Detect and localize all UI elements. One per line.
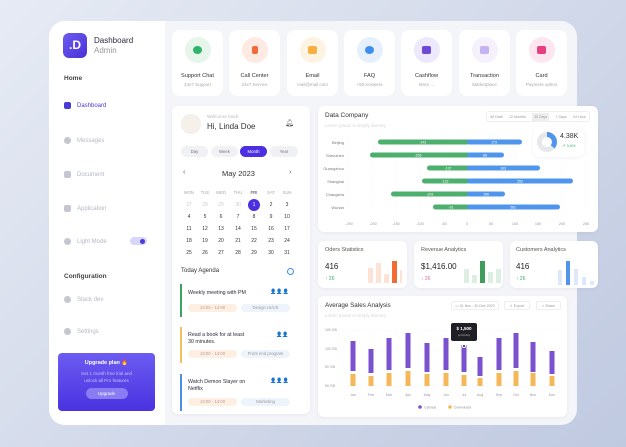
top card: call center: 24x7 Service [241, 82, 268, 87]
agenda item 1: Design UI/UX [252, 305, 279, 310]
text: 14 [235, 226, 241, 232]
nav: stack dev: Stack dev [77, 296, 103, 302]
text: 10 [284, 214, 290, 220]
brand text: Admin [94, 46, 117, 55]
donut callout [533, 127, 584, 157]
bar chart: data company: 252 [517, 180, 523, 184]
bar chart: data company: 88 [483, 154, 487, 158]
heading: home: Home [64, 75, 82, 82]
top card: support chat: 24x7 Support [184, 82, 211, 87]
agenda item 3: Netflix [188, 386, 203, 392]
text: 24 [284, 238, 290, 244]
tabs: Month [248, 149, 259, 154]
text: 5 [204, 214, 206, 220]
bar chart: data company: -137 [444, 166, 452, 170]
donut callout: ↗ 3.6% [562, 143, 576, 148]
top card: card: Payment option [526, 82, 557, 87]
sales toolbar: < Share [542, 304, 555, 308]
top card: email: mail@mail.com [297, 82, 328, 87]
upgrade card: Upgrade plan 🔥 [85, 360, 128, 366]
agenda item 1: 13:00 - 14:00 [200, 305, 225, 310]
bar chart: sales: Upload [424, 406, 436, 410]
bar chart: data company: 0 [466, 222, 468, 226]
panel: data company [318, 106, 598, 232]
text: 27 [218, 250, 224, 256]
bar chart: data company: 50 [489, 222, 493, 226]
upgrade card: Get 1 month free trial and [81, 371, 132, 376]
bar chart: data company: Wuhan [331, 205, 344, 210]
bar chart: sales: 55 GB [325, 384, 336, 388]
bar chart: data company: 261 [510, 206, 516, 210]
greeting: Hi, Linda Doe [207, 122, 255, 131]
top card: card: Card [535, 73, 548, 79]
bar chart: sales: Jun [443, 393, 449, 397]
text: WED [216, 190, 226, 195]
panel: customers analytics: Customers Analytics [516, 247, 566, 253]
tooltip [451, 323, 477, 341]
text: 18 [186, 238, 192, 244]
text: 28 [202, 202, 208, 208]
panel: customers analytics [510, 241, 598, 288]
bar chart: sales: Download [454, 406, 471, 410]
toggle [130, 237, 147, 245]
text: 7 [237, 214, 239, 220]
text: 31 [284, 250, 290, 256]
text: 16 [268, 226, 274, 232]
text: ‹ [183, 169, 185, 176]
bar chart: data company: -150 [392, 222, 400, 226]
bar chart: data company: Guangzhou [323, 166, 344, 171]
bar chart: data company: -250 [345, 222, 353, 226]
sales toolbar: ⇪ Export [510, 304, 524, 308]
nav: light mode: Light Mode [77, 238, 107, 244]
text: 20 [218, 238, 224, 244]
range tabs: 12 Months [509, 114, 526, 118]
panel: orders statistics: 416 [325, 262, 338, 271]
nav: messages: Messages [77, 138, 104, 144]
bar chart: data company: -122 [441, 180, 449, 184]
panel: orders statistics [318, 241, 407, 288]
text: 30 [235, 202, 241, 208]
logo: .D [69, 38, 81, 52]
bar chart: data company: 200 [559, 222, 565, 226]
bar chart: sales: Aug [477, 393, 483, 397]
text: 26 [202, 250, 208, 256]
top card: transaction: Marketplace [472, 82, 497, 87]
agenda item 3: Marketing [256, 399, 275, 404]
nav: document [64, 171, 104, 178]
bar chart: data company: Shenzhen [326, 153, 344, 158]
bar chart: data company: 250 [583, 222, 589, 226]
bar chart: data company: -201 [426, 192, 434, 196]
upgrade card: unlock all Pro features [84, 378, 129, 383]
icon: bell: 🔔︎ [285, 120, 294, 127]
tabs: Week [219, 149, 230, 154]
bar chart: sales: Dec [549, 393, 555, 397]
agenda item 2: 30 minutes. [188, 339, 215, 345]
logo [63, 33, 87, 58]
upgrade card [58, 353, 155, 411]
sales toolbar: ▭ 01 Nov - 30 Dec 2023 [455, 304, 495, 308]
bar chart: sales: Jan [350, 393, 356, 397]
nav: stack dev [64, 296, 104, 303]
text: 19 [202, 238, 208, 244]
greeting [207, 114, 256, 131]
text: 4 [188, 214, 190, 220]
text: › [289, 169, 291, 176]
agenda item 3 [180, 374, 290, 411]
heading: configuration: Configuration [64, 273, 107, 280]
text: 3 [286, 202, 288, 208]
nav: dashboard [64, 102, 106, 109]
panel: revenue analytics: Revenue Analytics [421, 247, 466, 253]
bar chart: sales: Oct [513, 393, 519, 397]
nav: light mode [64, 238, 107, 245]
bar chart: sales: Nov [530, 393, 536, 397]
bar chart: data company: -241 [419, 140, 427, 144]
top card: card [516, 30, 567, 96]
top card: support chat: Support Chat [181, 73, 214, 79]
bar chart: sales: Sep [496, 393, 502, 397]
text: 29 [251, 250, 257, 256]
tabs [181, 146, 298, 157]
top card: faq [344, 30, 395, 96]
text: SAT [267, 190, 275, 195]
calendar month header: May 2023 [222, 169, 255, 178]
bar chart: sales: Mar [386, 393, 393, 397]
panel: average sales analysis: Lorem Ipsum is simply dummy [325, 313, 386, 318]
text: 25 [186, 250, 192, 256]
agenda item 2: Front end program [248, 351, 283, 356]
bar chart: sales: May [424, 393, 431, 397]
text: 15 [251, 226, 257, 232]
text: 2 [270, 202, 272, 208]
bar chart: data company: -253 [414, 154, 422, 158]
text: 29 [218, 202, 224, 208]
text: SUN [282, 190, 292, 195]
text: 1 [253, 202, 255, 208]
nav: application: Application [77, 206, 106, 212]
text: 9 [270, 214, 272, 220]
text: 6 [220, 214, 222, 220]
bar chart: data company: Shanghai [327, 179, 344, 184]
agenda item 2 [180, 327, 290, 363]
panel: orders statistics: Oders Statistics [325, 247, 364, 253]
nav: dashboard: Dashboard [77, 102, 106, 108]
brand text [94, 36, 133, 55]
calendar grid [184, 190, 292, 256]
text: THU [234, 190, 242, 195]
panel: average sales analysis: Average Sales Analysis [325, 302, 391, 309]
panel: revenue analytics: ↓ 26 [421, 276, 430, 282]
top card: transaction: Transaction [470, 73, 499, 79]
agenda item 3: 13:00 - 14:00 [200, 399, 225, 404]
tooltip: profit/day [458, 333, 470, 337]
agenda item 1: Weekly meeting with PM [188, 290, 246, 296]
text: MON [184, 190, 194, 195]
nav: messages [64, 137, 104, 144]
bar chart: data company: -50 [441, 222, 447, 226]
brand text: Dashboard [94, 36, 133, 45]
top card: email [287, 30, 338, 96]
greeting: Welcome back [207, 115, 238, 120]
text: 21 [235, 238, 241, 244]
tabs: Day [191, 149, 198, 154]
top card: support chat [172, 30, 223, 96]
text: 12 [202, 226, 208, 232]
bar chart: sales: Apr [405, 393, 412, 397]
top card: call center [229, 30, 280, 96]
agenda item 1 [180, 284, 290, 317]
panel: calendar & agenda [172, 106, 310, 414]
text: FRI [251, 190, 257, 195]
text: 22 [251, 238, 257, 244]
panel: data company: Data Company [325, 112, 368, 119]
panel: orders statistics: ↑ 26 [325, 276, 334, 282]
top card: faq: +50 Answers [357, 82, 382, 87]
panel: revenue analytics [414, 241, 503, 288]
text: 17 [284, 226, 290, 232]
panel: customers analytics: 416 [516, 262, 529, 271]
bar chart: sales: 100 GB [325, 347, 338, 351]
agenda item 2: 👤👤 [276, 332, 288, 338]
text: 30 [268, 250, 274, 256]
bar chart: data company: 150 [535, 222, 541, 226]
bar chart: data company: -91 [448, 206, 454, 210]
range tabs: 7 Days [556, 114, 567, 118]
text: TUE [201, 190, 209, 195]
text: 13 [218, 226, 224, 232]
donut callout: 4.38K [560, 133, 578, 140]
range tabs [486, 111, 590, 122]
bar chart: data company: -200 [369, 222, 377, 226]
nav: settings [64, 328, 99, 335]
bar chart: data company: 193 [500, 166, 506, 170]
panel: customers analytics: ↑ 26 [516, 276, 525, 282]
text: 23 [268, 238, 274, 244]
sidebar [49, 21, 165, 425]
top card: call center: Call Center [240, 73, 268, 79]
bar chart: data company: Changsha [326, 192, 345, 197]
bar chart: data company: Beijing [332, 140, 344, 145]
panel: data company: Lorem Ipsum is simply dummy [325, 123, 386, 128]
bar chart: data company [323, 134, 589, 226]
agenda item 3: 👤👤👤 [270, 378, 289, 384]
text: 27 [186, 202, 192, 208]
range tabs: 24 Hour [573, 114, 586, 118]
bar chart: sales: 80 GB [325, 365, 336, 369]
bar chart: data company: 106 [483, 192, 489, 196]
nav: settings: Settings [77, 328, 99, 334]
text: 11 [186, 226, 192, 232]
agenda item 2: Read a book for at least [188, 332, 244, 338]
agenda item 3: Watch Demon Slayer on [188, 379, 245, 385]
top card: faq: FAQ [364, 73, 375, 79]
top card: transaction [459, 30, 510, 96]
top card: email: Email [306, 73, 320, 79]
main container [49, 21, 577, 425]
panel: revenue analytics: $1,416.00 [421, 262, 457, 271]
tabs: Year [280, 149, 288, 154]
bar chart: sales: Jul [462, 393, 466, 397]
nav: document: Document [77, 172, 104, 178]
top card: cashflow: Cashflow [415, 73, 438, 79]
panel: average sales analysis [318, 296, 567, 417]
agenda item 2: 13:00 - 14:00 [200, 351, 225, 356]
text: 8 [253, 214, 255, 220]
bar chart: sales [325, 328, 560, 410]
range tabs: 30 Days [534, 114, 547, 118]
bar chart: sales: Feb [368, 393, 374, 397]
heading: today agenda: Today Agenda [181, 268, 219, 274]
top card: cashflow [401, 30, 452, 96]
avatar [181, 114, 201, 134]
icon: add [287, 268, 294, 275]
bar chart: sales: 160 GB [325, 328, 338, 332]
range tabs: All Date [490, 114, 503, 118]
agenda item 1: 👤👤👤 [270, 289, 289, 295]
top card: cashflow: More ... [419, 82, 434, 87]
tooltip: $ 1,500 [456, 326, 472, 331]
nav: application [64, 205, 106, 212]
bar chart: data company: 173 [491, 140, 497, 144]
bar chart: data company: 100 [512, 222, 518, 226]
upgrade card: Upgrade [98, 391, 115, 396]
bar chart: data company: -100 [416, 222, 424, 226]
sales toolbar [451, 301, 561, 310]
text: 28 [235, 250, 241, 256]
